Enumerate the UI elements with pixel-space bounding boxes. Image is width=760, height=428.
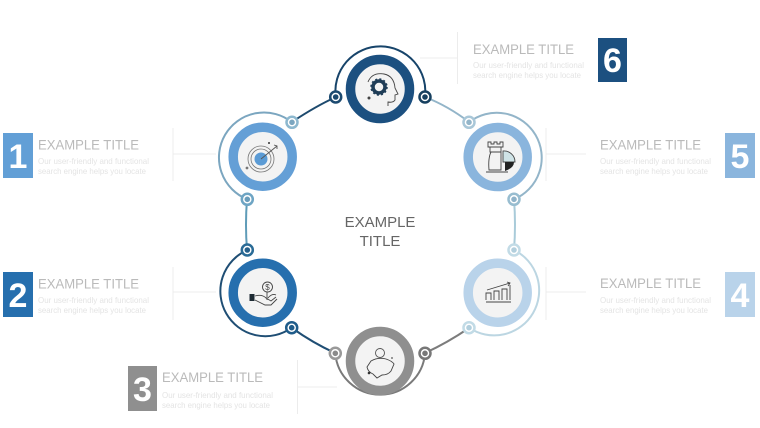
- node 3: piggy bank: [330, 332, 430, 395]
- icon: target: [246, 142, 277, 172]
- connector: node 6 to node 5: [425, 97, 469, 122]
- number box 3: [128, 366, 157, 411]
- center title: TITLE: [360, 233, 400, 250]
- number box 2: [3, 272, 33, 317]
- icon: rook and chart: [486, 142, 515, 172]
- label 6: Our user-friendly and functional: [473, 60, 584, 70]
- connector: node 4 to node 3: [425, 328, 469, 353]
- label 1: EXAMPLE TITLE: [38, 136, 139, 152]
- label 2: EXAMPLE TITLE: [38, 276, 139, 292]
- label 3: EXAMPLE TITLE: [162, 369, 263, 385]
- number box 6: [598, 38, 627, 82]
- number box 4: [725, 272, 755, 317]
- node 1: target: [219, 112, 298, 205]
- connector: node 5 to node 4: [514, 199, 515, 250]
- label 6: 6: [603, 42, 622, 80]
- node 6: head with gear: [330, 46, 430, 119]
- number box 5: [725, 133, 755, 178]
- icon: head with gear: [368, 74, 398, 106]
- node 2: hand with coin plant: [220, 244, 297, 336]
- number box 1: [3, 133, 33, 178]
- label 2: [3, 272, 149, 317]
- label 2: search engine helps you locate: [38, 305, 146, 315]
- label 4: Our user-friendly and functional: [600, 295, 711, 305]
- label 3: 3: [133, 371, 152, 409]
- label 2: 2: [9, 277, 27, 315]
- label 5: 5: [731, 138, 749, 176]
- label 5: [600, 133, 755, 178]
- label 1: search engine helps you locate: [38, 166, 146, 176]
- label 6: [473, 38, 627, 82]
- icon: hand with coin plant: $: [265, 283, 270, 292]
- label 3: Our user-friendly and functional: [162, 390, 273, 400]
- icon: growth chart: [486, 282, 511, 302]
- label 6: EXAMPLE TITLE: [473, 41, 574, 57]
- label 1: 1: [9, 138, 27, 176]
- label 3: [128, 366, 273, 411]
- node 5: chess rook and chart: [464, 113, 542, 205]
- center title: EXAMPLE: [345, 214, 415, 231]
- label 4: 4: [731, 277, 750, 315]
- label 2: Our user-friendly and functional: [38, 295, 149, 305]
- label 4: search engine helps you locate: [600, 305, 708, 315]
- label 5: EXAMPLE TITLE: [600, 136, 701, 152]
- label 6: search engine helps you locate: [473, 70, 581, 80]
- label 1: Our user-friendly and functional: [38, 156, 149, 166]
- label 1: [3, 133, 149, 178]
- label 4: EXAMPLE TITLE: [600, 275, 701, 291]
- label 5: search engine helps you locate: [600, 166, 708, 176]
- label 4: [600, 272, 755, 317]
- connector: node 1 to node 6: [292, 97, 336, 122]
- label 3: search engine helps you locate: [162, 400, 270, 410]
- connector: node 3 to node 2: [292, 328, 335, 353]
- icon: piggy bank: [367, 348, 394, 378]
- connector: node 2 to node 1: [246, 199, 247, 250]
- node 4: growth chart: [464, 244, 539, 335]
- label 5: Our user-friendly and functional: [600, 156, 711, 166]
- center title: [345, 214, 415, 250]
